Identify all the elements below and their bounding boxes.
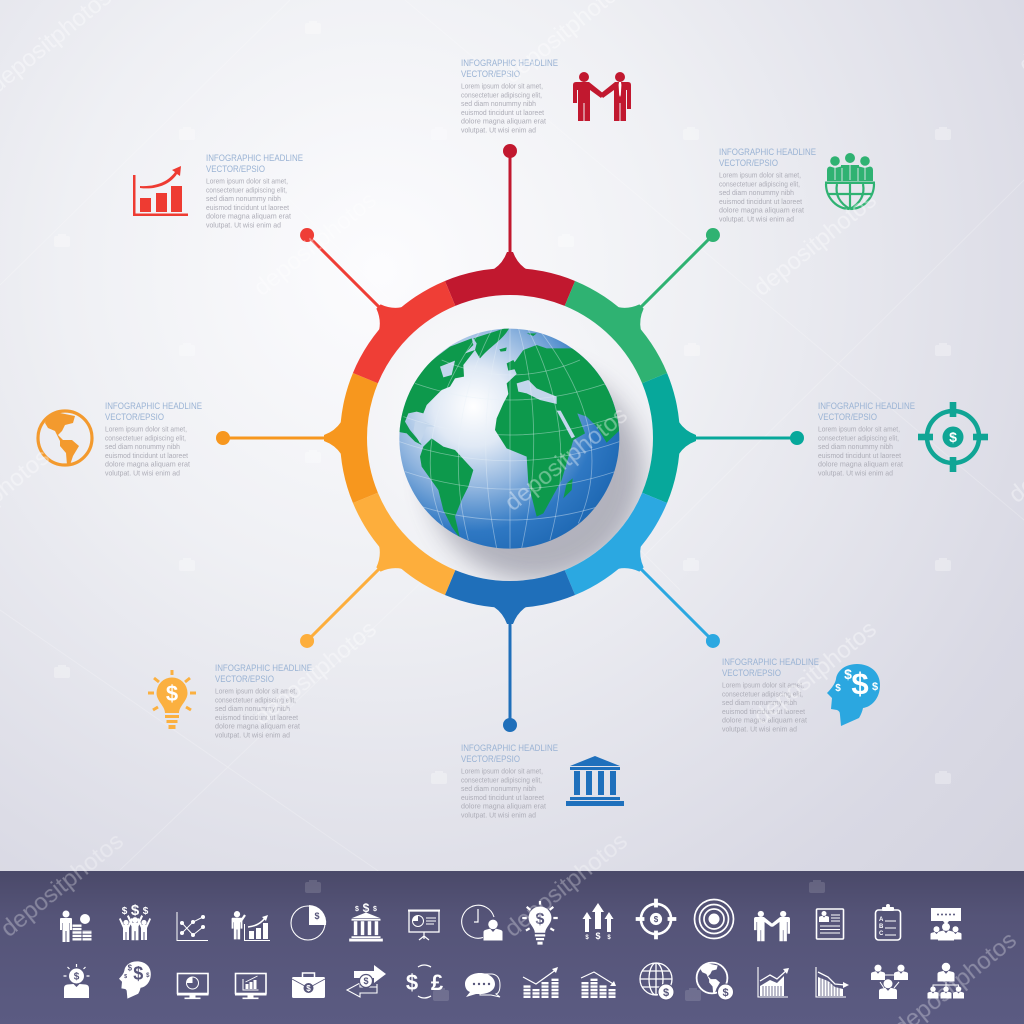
icon: target dollar: $: [949, 429, 957, 445]
icon: idea bulb: [522, 901, 558, 945]
block: east: [818, 401, 915, 478]
icon: rising bar chart: [133, 166, 188, 216]
icon: people on globe: [825, 153, 875, 209]
icon: monitor with pie: [177, 974, 208, 999]
body text: dolore magna aliquam erat: [461, 117, 547, 126]
body text: volutpat. Ut wisi enim ad: [722, 724, 797, 734]
block: south west: [215, 663, 312, 740]
body text: Lorem ipsum dolor sit amet,: [818, 424, 900, 434]
icon: handshake: [573, 72, 631, 121]
icon: growth arrows: [582, 903, 614, 941]
panel: icon footer: [0, 871, 1024, 1024]
body text: Lorem ipsum dolor sit amet,: [722, 680, 804, 690]
icon: briefcase: $: [306, 984, 311, 993]
icon: head with dollars: $: [133, 963, 143, 983]
icon: currency exchange: $: [406, 970, 418, 995]
headline: INFOGRAPHIC HEADLINE: [215, 663, 312, 674]
spoke: west: [216, 422, 341, 454]
icon: briefcase: [292, 973, 325, 998]
icon: people network: [871, 965, 908, 999]
body text: sed diam nonummy nibh: [719, 188, 794, 197]
body text: consectetuer adipiscing elit,: [818, 433, 899, 442]
spoke: east: [679, 422, 804, 454]
body text: Lorem ipsum dolor sit amet,: [206, 176, 288, 186]
headline: VECTOR/EPSIO: [215, 674, 274, 685]
icon: clipboard: C: [879, 931, 884, 937]
icon: bank with dollars: [349, 901, 383, 942]
icon: clock with person: [462, 905, 502, 940]
body text: euismod tincidunt ut laoreet: [461, 108, 545, 117]
body text: sed diam nonummy nibh: [461, 99, 536, 108]
body text: dolore magna aliquam erat: [722, 716, 808, 725]
body text: Lorem ipsum dolor sit amet,: [461, 766, 543, 776]
icon: coin stacks rising: [523, 967, 558, 998]
body text: volutpat. Ut wisi enim ad: [818, 468, 893, 478]
icon: team with dollars: [119, 902, 151, 940]
watermarks: depositphotos: [500, 402, 633, 517]
body text: euismod tincidunt ut laoreet: [719, 197, 803, 206]
headline: INFOGRAPHIC HEADLINE: [818, 401, 915, 412]
body text: consectetuer adipiscing elit,: [722, 689, 803, 698]
icon: head with dollars: $: [124, 974, 127, 980]
body text: euismod tincidunt ut laoreet: [722, 707, 806, 716]
body text: volutpat. Ut wisi enim ad: [461, 126, 536, 134]
block: south: [461, 743, 558, 820]
body text: sed diam nonummy nibh: [105, 442, 180, 451]
icon: monitor with chart: [235, 974, 266, 999]
icon: growth arrows: $: [595, 931, 601, 941]
body text: Lorem ipsum dolor sit amet,: [461, 82, 543, 90]
body text: dolore magna aliquam erat: [206, 212, 292, 221]
icon row 1: [60, 899, 962, 945]
icon: person with chart: [232, 911, 270, 941]
icon: org chart: [928, 963, 964, 998]
icon: decline area chart: [816, 967, 849, 997]
headline: VECTOR/EPSIO: [818, 412, 877, 423]
body text: volutpat. Ut wisi enim ad: [105, 468, 180, 478]
icon: person with coins: [60, 910, 90, 942]
icon: head with dollars: $: [835, 683, 841, 694]
icon: meeting speech bubble: [930, 908, 962, 940]
icon: concentric target: [694, 900, 734, 938]
headline: VECTOR/EPSIO: [719, 158, 778, 169]
body text: dolore magna aliquam erat: [105, 460, 191, 469]
icon: earth americas: [38, 411, 92, 465]
inner disk: [367, 295, 653, 581]
icon: target: $: [654, 915, 659, 924]
globe: [399, 328, 620, 549]
icon: bank with dollars: $: [373, 906, 377, 913]
body text: dolore magna aliquam erat: [818, 460, 904, 469]
headline: VECTOR/EPSIO: [206, 164, 265, 175]
body text: Lorem ipsum dolor sit amet,: [105, 424, 187, 434]
icon: idea bulb: [148, 670, 196, 729]
headline: VECTOR/EPSIO: [722, 668, 781, 679]
body text: sed diam nonummy nibh: [461, 784, 536, 793]
icon: earth with coin: $: [722, 987, 729, 999]
icon: clipboard: B: [879, 924, 884, 930]
icon: head with dollars: $: [872, 681, 878, 693]
body text: sed diam nonummy nibh: [206, 194, 281, 203]
headline: VECTOR/EPSIO: [105, 412, 164, 423]
icon: bank with dollars: $: [355, 906, 359, 913]
icon: growth arrows: $: [585, 935, 589, 941]
body text: sed diam nonummy nibh: [215, 704, 290, 713]
body text: volutpat. Ut wisi enim ad: [215, 730, 290, 740]
body text: consectetuer adipiscing elit,: [461, 90, 542, 99]
block: west: [105, 401, 202, 478]
watermarks: depositphotos: [749, 187, 882, 302]
body text: dolore magna aliquam erat: [215, 722, 301, 731]
body text: euismod tincidunt ut laoreet: [215, 713, 299, 722]
headline: INFOGRAPHIC HEADLINE: [722, 657, 819, 668]
body text: volutpat. Ut wisi enim ad: [719, 214, 794, 224]
icon: chat bubbles: [465, 973, 500, 997]
icon: presentation board: [408, 910, 440, 940]
icon: head with dollars: [827, 664, 880, 726]
body text: euismod tincidunt ut laoreet: [105, 451, 189, 460]
icon: target: [636, 899, 676, 939]
body text: dolore magna aliquam erat: [719, 206, 805, 215]
spoke: top: [494, 144, 526, 269]
icon: target dollar: [918, 402, 988, 472]
icon: team with dollars: $: [131, 902, 140, 919]
body text: volutpat. Ut wisi enim ad: [206, 220, 281, 230]
headline: INFOGRAPHIC HEADLINE: [461, 743, 558, 754]
globe shadow: [427, 365, 643, 581]
icon: pie chart: [291, 905, 326, 940]
icon: businessman with idea: [64, 964, 90, 998]
icon: growth area chart: [758, 967, 789, 997]
body text: consectetuer adipiscing elit,: [719, 179, 800, 188]
icon: earth with coin: [697, 963, 734, 1000]
icon: team with dollars: $: [122, 906, 128, 917]
icon: head with dollars: $: [146, 973, 150, 979]
block: north east: [719, 147, 816, 224]
spoke: south: [494, 607, 526, 732]
icon: coin stacks falling: [581, 972, 616, 998]
icon row 2: [64, 961, 964, 1000]
icon: exchange arrows: $: [363, 976, 369, 986]
icon: head with dollars: $: [844, 666, 852, 682]
body text: consectetuer adipiscing elit,: [215, 695, 296, 704]
body text: Lorem ipsum dolor sit amet,: [719, 170, 801, 180]
icon: bank: [566, 756, 624, 806]
body text: euismod tincidunt ut laoreet: [206, 203, 290, 212]
body text: euismod tincidunt ut laoreet: [461, 793, 545, 802]
spoke: south west: [291, 546, 402, 657]
block: south east: [722, 657, 819, 734]
segmented ring: [340, 268, 680, 608]
headline: INFOGRAPHIC HEADLINE: [719, 147, 816, 158]
body text: volutpat. Ut wisi enim ad: [461, 810, 536, 820]
body text: sed diam nonummy nibh: [818, 442, 893, 451]
body text: sed diam nonummy nibh: [722, 698, 797, 707]
body text: dolore magna aliquam erat: [461, 802, 547, 811]
body text: consectetuer adipiscing elit,: [105, 433, 186, 442]
icon: currency exchange: £: [431, 970, 444, 995]
block: north west: [206, 153, 303, 230]
headline: VECTOR/EPSIO: [461, 69, 520, 80]
icon: head with dollars: [119, 961, 151, 999]
body text: consectetuer adipiscing elit,: [206, 185, 287, 194]
spoke: north west: [291, 219, 402, 330]
icon: head with dollars: $: [128, 963, 133, 972]
icon: businessman with idea: $: [74, 972, 80, 982]
icon: clipboard: A: [879, 917, 884, 923]
icon: globe with coin: [640, 963, 674, 1000]
icon: scatter chart: [177, 912, 208, 940]
spoke: south east: [618, 546, 729, 657]
watermarks: depositphotos: [749, 616, 882, 731]
icon: exchange arrows: [347, 965, 386, 997]
headline: INFOGRAPHIC HEADLINE: [105, 401, 202, 412]
icon: handshake: [754, 911, 790, 941]
icon: team with dollars: $: [143, 906, 149, 917]
body text: Lorem ipsum dolor sit amet,: [215, 686, 297, 696]
icon: growth arrows: $: [607, 935, 611, 941]
watermarks: depositphotos: [249, 187, 382, 302]
watermarks: depositphotos: [500, 828, 633, 943]
icon: idea bulb: $: [166, 681, 178, 706]
headline: VECTOR/EPSIO: [461, 754, 520, 765]
icon: globe with coin: $: [663, 987, 669, 999]
body text: consectetuer adipiscing elit,: [461, 775, 542, 784]
body text: euismod tincidunt ut laoreet: [818, 451, 902, 460]
watermarks: depositphotos: [249, 616, 382, 731]
icon: bank with dollars: $: [363, 901, 370, 915]
icon: profile card: [816, 909, 844, 939]
icon: pie chart: $: [314, 911, 320, 921]
spoke: north east: [618, 219, 729, 330]
icon: head with dollars: $: [851, 666, 869, 701]
icon: currency exchange: [406, 965, 444, 998]
block: top: [461, 58, 558, 134]
icon: idea bulb: $: [536, 911, 545, 928]
panel: central diagram: [216, 144, 804, 732]
headline: INFOGRAPHIC HEADLINE: [206, 153, 303, 164]
headline: INFOGRAPHIC HEADLINE: [461, 58, 558, 69]
icon: clipboard: [876, 904, 900, 940]
